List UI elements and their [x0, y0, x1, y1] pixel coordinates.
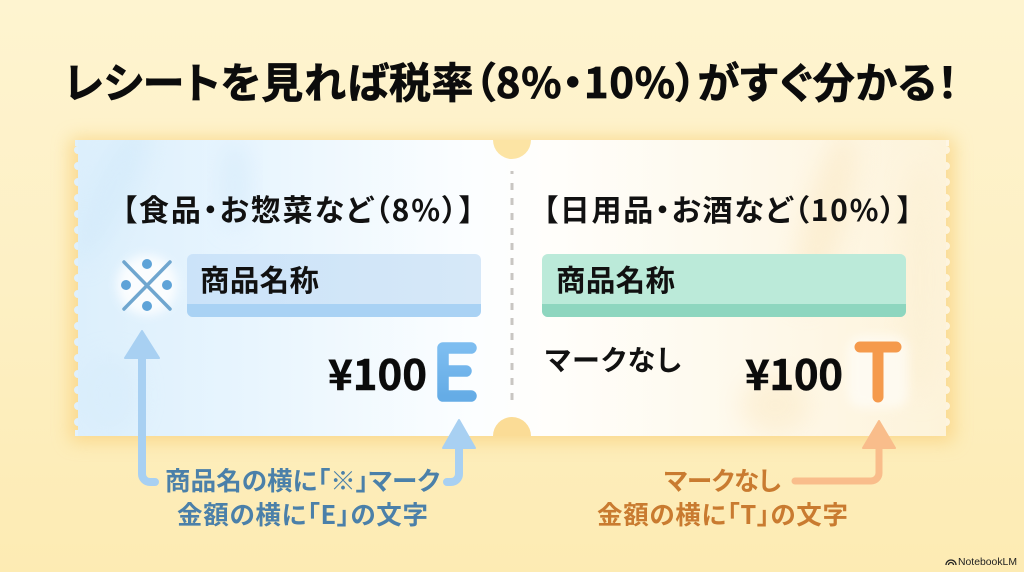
- callout: 8%: [165, 461, 440, 532]
- callout: 10%: [597, 461, 848, 532]
- arrow: to letter T: [795, 421, 895, 481]
- callout: 8%: 金額の横に「E」の文字: [177, 495, 428, 532]
- icon: letter E: [443, 348, 471, 396]
- panel: 10% right: [542, 186, 912, 408]
- callout: 10%: マークなし: [664, 461, 781, 498]
- product name bar: blue: 商品名称: [200, 258, 319, 300]
- panel: 8% left: [117, 186, 481, 403]
- perforation divider: [510, 171, 514, 400]
- heading: 8%: 【食品・お惣菜など（8%）】: [122, 186, 474, 230]
- ticket panel: [60, 109, 954, 455]
- arrow: to kome mark: [125, 331, 159, 482]
- price: 100 yen: ¥100: [745, 342, 843, 403]
- icon: kome mark: [117, 255, 177, 315]
- product name bar: blue: [187, 254, 481, 317]
- watermark: NotebookLM: NotebookLM: [958, 556, 1017, 568]
- product name bar: green: [542, 254, 906, 317]
- callout: 10%: 金額の横に「T」の文字: [597, 495, 848, 532]
- arrow: to letter E: [443, 420, 475, 482]
- title: レシートを見れば税率（8%・10%）がすぐ分かる！: [64, 50, 958, 111]
- no mark label: マークなし: [545, 339, 681, 379]
- callout: 8%: 商品名の横に「※」マーク: [165, 461, 440, 498]
- price: 100 yen: ¥100: [328, 342, 427, 403]
- heading: 10%: 【日用品・お酒など（10%）】: [543, 186, 912, 230]
- product name bar: green: 商品名称: [556, 258, 675, 300]
- icon: letter T: [848, 336, 908, 408]
